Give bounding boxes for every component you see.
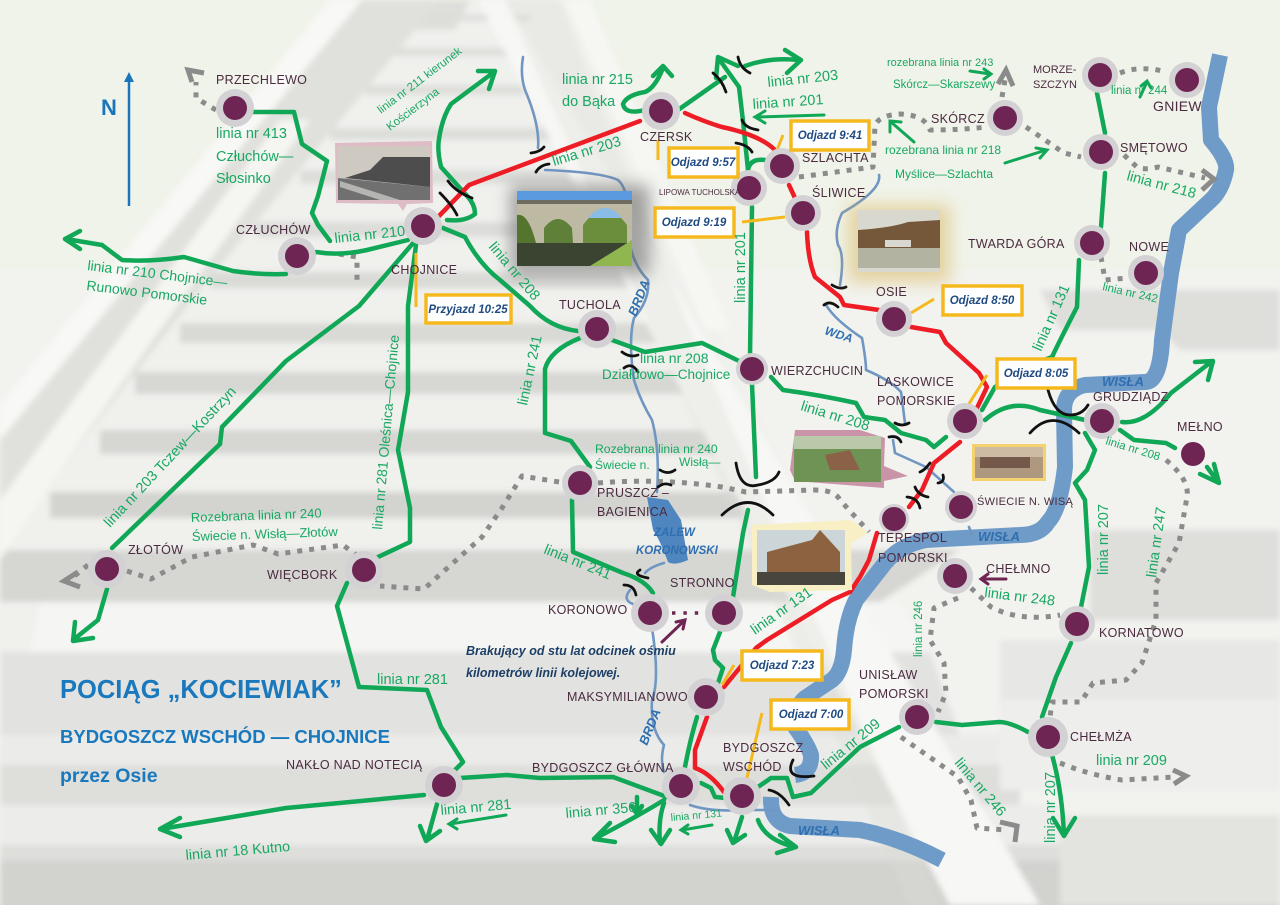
green line labels: linia nr 131 — [748, 584, 815, 638]
station names: OSIE — [876, 285, 907, 299]
green line labels: Słosinko — [216, 171, 271, 187]
green line labels: linia nr 208 — [799, 399, 871, 435]
green line labels: Rozebrana linia nr 240 — [191, 505, 322, 525]
green line labels: linia nr 203 — [550, 134, 623, 170]
green line labels: Świecie n. — [595, 457, 650, 472]
green line labels: linia nr 207 — [1043, 772, 1059, 843]
station names: TERESPOL — [878, 531, 947, 545]
green line labels: linia nr 244 — [1111, 85, 1168, 97]
title: przez Osie — [60, 765, 158, 787]
station names: CHEŁMNO — [986, 562, 1051, 576]
green line labels: linia nr 241 — [542, 542, 613, 583]
green line labels: linia nr 208 — [1104, 435, 1161, 463]
station names: POMORSKI — [859, 687, 929, 701]
green line labels: linia nr 131 — [670, 808, 723, 824]
station names: PRZECHLEWO — [216, 73, 307, 87]
note: missing section: kilometrów linii kolejowej. — [466, 666, 620, 680]
green line labels: Runowo Pomorskie — [86, 277, 208, 308]
green line labels: Działdowo—Chojnice — [602, 367, 730, 382]
dotted missing section Koronowo–Stronno — [672, 611, 708, 615]
dotted dismantled lines — [64, 69, 1214, 842]
photo: Chojnice station — [335, 141, 433, 211]
station names: CZERSK — [640, 130, 693, 144]
departure time boxes: Odjazd 9:19 — [662, 217, 727, 229]
green line labels: linia nr 209 — [1096, 753, 1167, 769]
green line labels: linia nr 203 Tczew—Kostrzyn — [101, 384, 240, 531]
dark pointer arrows — [662, 574, 1006, 642]
green line labels: linia nr 203 — [767, 68, 839, 91]
green line labels: linia nr 207 — [1096, 504, 1112, 575]
red route of the Kociewiak train — [439, 113, 987, 792]
departure time boxes: Odjazd 7:00 — [779, 709, 844, 721]
green line labels: linia nr 208 — [640, 350, 709, 366]
green line labels: Kościerzyna — [385, 86, 442, 133]
green line labels — [86, 45, 1198, 864]
station names: WIĘCBORK — [267, 568, 338, 582]
river labels: BRDA — [636, 707, 664, 747]
north arrow — [101, 72, 134, 206]
station names: KORNATOWO — [1099, 626, 1184, 640]
green line labels: linia nr 209 — [818, 716, 884, 773]
green line labels: linia nr 210 Chojnice— — [87, 257, 228, 290]
photo: Terespol Pomorski station — [752, 520, 868, 592]
station names: ŚWIECIE N. WISĄ — [977, 495, 1074, 508]
departure time boxes: Przyjazd 10:25 — [428, 304, 508, 316]
green line labels: linia nr 242 — [1101, 281, 1159, 306]
green line labels: do Bąka — [562, 94, 616, 110]
rivers: Brda and Wda — [522, 57, 972, 810]
station names: GRUDZIĄDZ — [1093, 390, 1169, 404]
station names: SZLACHTA — [802, 151, 869, 165]
green line labels: linia nr 218 — [1125, 168, 1198, 202]
station names: BAGIENICA — [597, 505, 668, 519]
river labels: ZALEW — [653, 527, 696, 539]
small pointer arrows — [449, 69, 1151, 834]
station names: POMORSKIE — [877, 394, 955, 408]
station names — [128, 64, 1223, 775]
departure time boxes: Odjazd 9:41 — [798, 130, 862, 142]
green line labels: Wisłą— — [679, 455, 720, 469]
photo: Osie bridge — [848, 205, 950, 283]
river labels: WISŁA — [798, 823, 840, 838]
river labels: WISŁA — [1102, 374, 1144, 389]
station names: POMORSKI — [878, 551, 948, 565]
green railway lines — [65, 50, 1219, 853]
green line labels: linia nr 210 — [334, 224, 406, 247]
departure time boxes: Odjazd 7:23 — [750, 660, 815, 672]
station names: SKÓRCZ — [931, 111, 985, 126]
title: POCIĄG „KOCIEWIAK” — [60, 676, 342, 704]
station names: LIPOWA TUCHOLSKA — [659, 188, 741, 197]
photo: Brda viaduct — [510, 185, 650, 275]
green line labels: Myślice—Szlachta — [895, 167, 993, 181]
river labels: WISŁA — [978, 529, 1020, 544]
green line labels: linia nr 246 — [951, 755, 1009, 820]
river labels — [625, 278, 1144, 838]
station names: TUCHOLA — [559, 298, 621, 312]
note: missing section — [466, 644, 676, 680]
green line labels: linia nr 413 — [216, 126, 287, 142]
station names: BYDGOSZCZ GŁÓWNA — [532, 760, 674, 775]
green line labels: Rozebrana linia nr 240 — [595, 442, 718, 456]
station names: NAKŁO NAD NOTECIĄ — [286, 758, 423, 772]
stations — [88, 57, 1205, 815]
river: Wisła upper course — [794, 55, 1226, 775]
station names: NOWE — [1129, 240, 1169, 254]
station names: STRONNO — [670, 576, 735, 590]
lake: Zalew Koronowski — [647, 497, 688, 564]
green line labels: linia nr 211 kierunek — [376, 45, 465, 116]
green line labels: linia nr 281 — [377, 672, 448, 688]
green line labels: linia nr 356 — [565, 800, 637, 822]
title — [60, 676, 390, 787]
note: missing section: Brakujący od stu lat odcinek ośmiu — [466, 644, 676, 658]
station names: UNISŁAW — [859, 668, 918, 682]
departure time boxes — [426, 121, 1075, 729]
green line labels: linia nr 18 Kutno — [185, 839, 291, 864]
station names: KORONOWO — [548, 603, 627, 617]
station names: CZŁUCHÓW — [236, 222, 311, 237]
river labels: KORONOWSKI — [636, 545, 719, 557]
yellow leader lines — [416, 135, 987, 782]
north arrow: N — [101, 95, 117, 120]
station names: SZCZYN — [1033, 79, 1077, 91]
station names: LASKOWICE — [877, 375, 954, 389]
black bridge marks — [440, 57, 1088, 805]
green line labels: linia nr 281 Oleśnica—Chojnice — [369, 334, 402, 530]
station names: CHEŁMŻA — [1070, 730, 1132, 744]
green line labels: linia nr 208 — [485, 239, 543, 304]
green line labels: rozebrana linia nr 218 — [885, 143, 1001, 157]
departure time boxes: Odjazd 9:57 — [671, 157, 736, 169]
photo: Świecie station — [972, 444, 1046, 481]
station names: WIERZCHUCIN — [771, 364, 863, 378]
station names: MORZE- — [1033, 64, 1077, 76]
green line labels: linia nr 281 — [440, 797, 512, 819]
station names: ŚLIWICE — [812, 185, 866, 200]
river: Wisła lower course — [771, 797, 942, 860]
green line labels: linia nr 201 — [733, 232, 749, 303]
departure time boxes: Odjazd 8:50 — [950, 295, 1015, 307]
green line labels: Skórcz—Skarszewy — [893, 79, 995, 91]
station names: TWARDA GÓRA — [968, 236, 1065, 251]
green line labels: linia nr 246 — [913, 601, 925, 657]
green line labels: Człuchów— — [216, 149, 294, 165]
station names: GNIEW — [1153, 98, 1202, 114]
station names: CHOJNICE — [391, 263, 457, 277]
departure time boxes: Odjazd 8:05 — [1004, 368, 1069, 380]
station names: MAKSYMILIANOWO — [567, 690, 688, 704]
photo: aerial view callout — [790, 430, 908, 488]
green line labels: linia nr 248 — [984, 585, 1056, 610]
green line labels: linia nr 201 — [752, 92, 824, 113]
green line labels: linia nr 241 — [515, 334, 546, 407]
river labels: BRDA — [625, 278, 653, 318]
station names: ZŁOTÓW — [128, 542, 183, 557]
title: BYDGOSZCZ WSCHÓD — CHOJNICE — [60, 726, 390, 747]
station names: WSCHÓD — [723, 759, 782, 774]
station names: BYDGOSZCZ — [723, 741, 804, 755]
river labels: WDA — [823, 324, 855, 346]
green line labels: Świecie n. Wisłą—Złotów — [192, 524, 339, 544]
station names: MEŁNO — [1177, 420, 1223, 434]
green line labels: linia nr 215 — [562, 72, 633, 88]
station names: SMĘTOWO — [1120, 141, 1188, 155]
station names: PRUSZCZ – — [597, 486, 669, 500]
green line labels: linia nr 131 — [1030, 282, 1074, 354]
green line labels: rozebrana linia nr 243 — [887, 57, 993, 69]
green line labels: linia nr 247 — [1144, 506, 1170, 579]
